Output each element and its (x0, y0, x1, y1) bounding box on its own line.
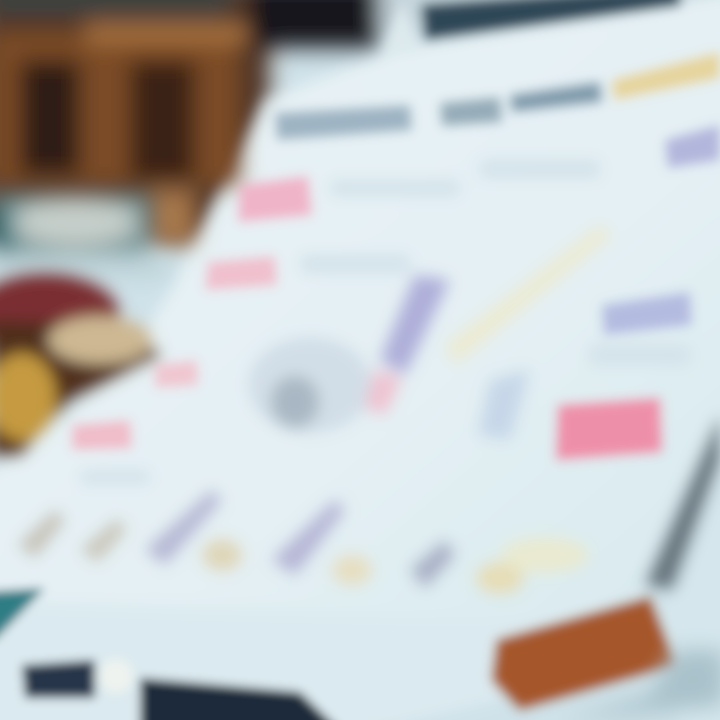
dark backdrop top (0, 0, 720, 240)
teal corner bottom left (0, 588, 45, 640)
paper peak at top (380, 0, 420, 55)
teal and white object left (0, 195, 170, 280)
brown jars top left (0, 0, 250, 245)
dark device at top (422, 0, 680, 40)
heading block (275, 52, 720, 140)
hand left (0, 273, 160, 455)
shadow beneath stopper (560, 650, 720, 720)
small blue chart (478, 370, 530, 440)
yellow diagonal line (445, 225, 612, 365)
dark diagonal stick right (645, 415, 720, 590)
row of small bar charts (18, 490, 589, 594)
cork stopper bottom right (492, 597, 676, 710)
central chart (248, 275, 450, 433)
purple labels top right (602, 125, 720, 335)
pink labels (72, 176, 662, 460)
faint text lines (80, 160, 690, 484)
dark pen bottom (22, 659, 350, 720)
